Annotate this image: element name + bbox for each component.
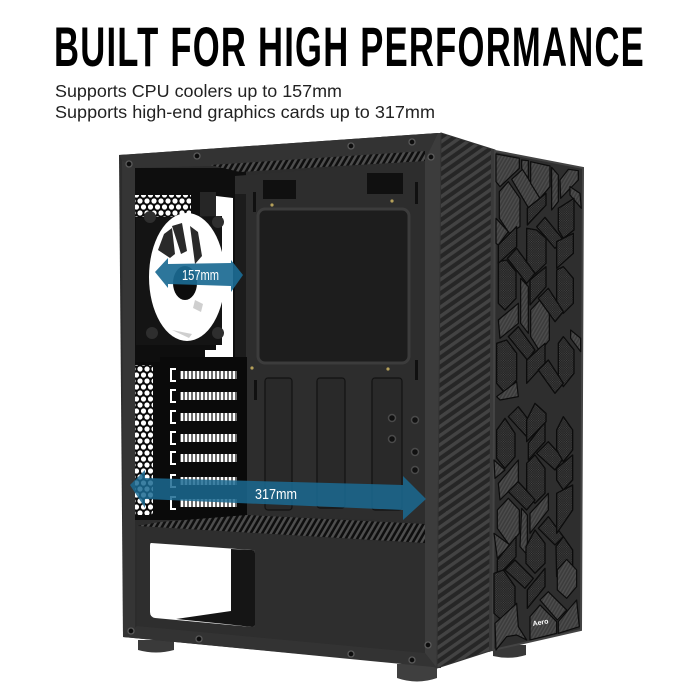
tray lower cutouts bbox=[265, 378, 402, 510]
tray slots bbox=[253, 173, 418, 400]
top vent strip bbox=[210, 151, 425, 172]
subtitle text: Supports high-end graphics cards up to 317mm bbox=[55, 102, 435, 122]
feet bbox=[138, 640, 526, 682]
PSU shroud bbox=[137, 526, 425, 653]
CPU cutout bbox=[258, 209, 409, 363]
bottom rail bbox=[123, 626, 437, 668]
subtitle text: Supports CPU coolers up to 157mm bbox=[55, 81, 342, 101]
PSU opening bbox=[150, 543, 255, 627]
expansion slots bbox=[160, 357, 247, 520]
arrow: 317mm graphics card length bbox=[130, 470, 426, 520]
side carbon panel bbox=[437, 133, 495, 668]
front panel edge bbox=[489, 149, 497, 652]
white gap behind cooler bbox=[216, 196, 233, 361]
standoffs bbox=[388, 414, 418, 474]
cooler pillar bbox=[200, 192, 216, 222]
logo: Aero bbox=[532, 618, 549, 628]
motherboard tray bbox=[235, 160, 425, 522]
fan bbox=[136, 211, 225, 345]
honeycomb upper bbox=[135, 195, 191, 217]
front panel lower weave bbox=[494, 403, 579, 650]
arrow: 157mm cooler clearance bbox=[155, 258, 243, 292]
left frame bbox=[122, 160, 135, 637]
front corner frame bbox=[425, 133, 441, 668]
front panel base bbox=[493, 151, 583, 650]
arrow: 317mm graphics card length: 317mm bbox=[255, 486, 297, 503]
white bracket piece bbox=[205, 350, 233, 362]
arrow: 157mm cooler clearance: 157mm bbox=[182, 267, 219, 284]
honeycomb rear panel bbox=[131, 362, 161, 520]
tray vertical rail bbox=[235, 194, 246, 364]
front panel upper weave bbox=[496, 154, 581, 400]
subtitle text bbox=[55, 81, 435, 122]
side chassis body bbox=[119, 133, 438, 667]
PC case bbox=[119, 133, 583, 682]
screws bbox=[126, 139, 434, 663]
standoff pins bbox=[250, 199, 394, 371]
shelf vent bbox=[137, 515, 425, 543]
interior dark top bbox=[135, 168, 246, 365]
top bar bbox=[119, 133, 438, 168]
